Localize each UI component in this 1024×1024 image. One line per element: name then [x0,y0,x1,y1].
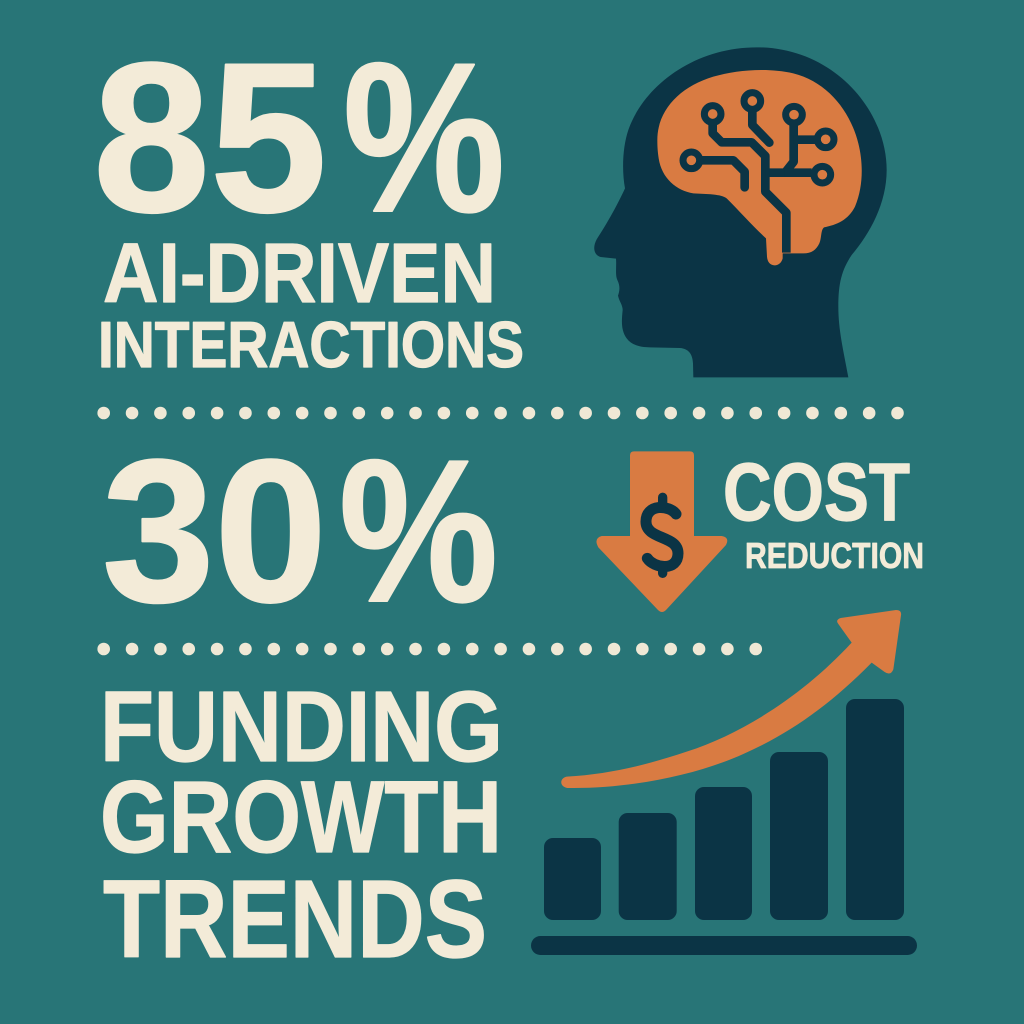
bar 3 [695,787,752,920]
stat: 85%: % [343,19,505,257]
growth arrow [561,610,901,788]
bar 4 [770,752,828,920]
bar 5 [846,699,904,920]
heading: GROWTH: GROWTH [100,760,502,874]
panel: AI-driven interactions [93,19,887,381]
bar chart [531,699,917,955]
circuit traces [700,112,815,253]
dollar sign [646,497,678,573]
heading: INTERACTIONS: INTERACTIONS [98,308,524,381]
brain [657,70,862,265]
divider: lower dotted line [104,643,758,655]
down arrow [596,451,727,612]
divider: upper dotted line [104,407,898,419]
panel: funding growth trends [100,610,917,981]
stat: 30%: 30 [102,418,327,645]
label: REDUCTION: REDUCTION [745,535,924,576]
stat: 30%: % [339,418,498,645]
icon: down arrow with dollar [596,451,727,612]
stat: 85%: 85 [93,19,327,257]
circuit nodes [683,93,834,183]
heading: FUNDING: FUNDING [100,671,503,783]
head silhouette [594,47,887,377]
chart baseline [531,936,917,955]
heading: AI-DRIVEN: AI-DRIVEN [103,226,496,320]
heading: TRENDS: TRENDS [103,858,487,981]
panel: cost reduction [102,418,924,645]
label: COST: COST [723,447,910,538]
bar 1 [544,838,601,920]
icon: head with circuit brain [594,47,887,377]
bar 2 [619,813,677,920]
